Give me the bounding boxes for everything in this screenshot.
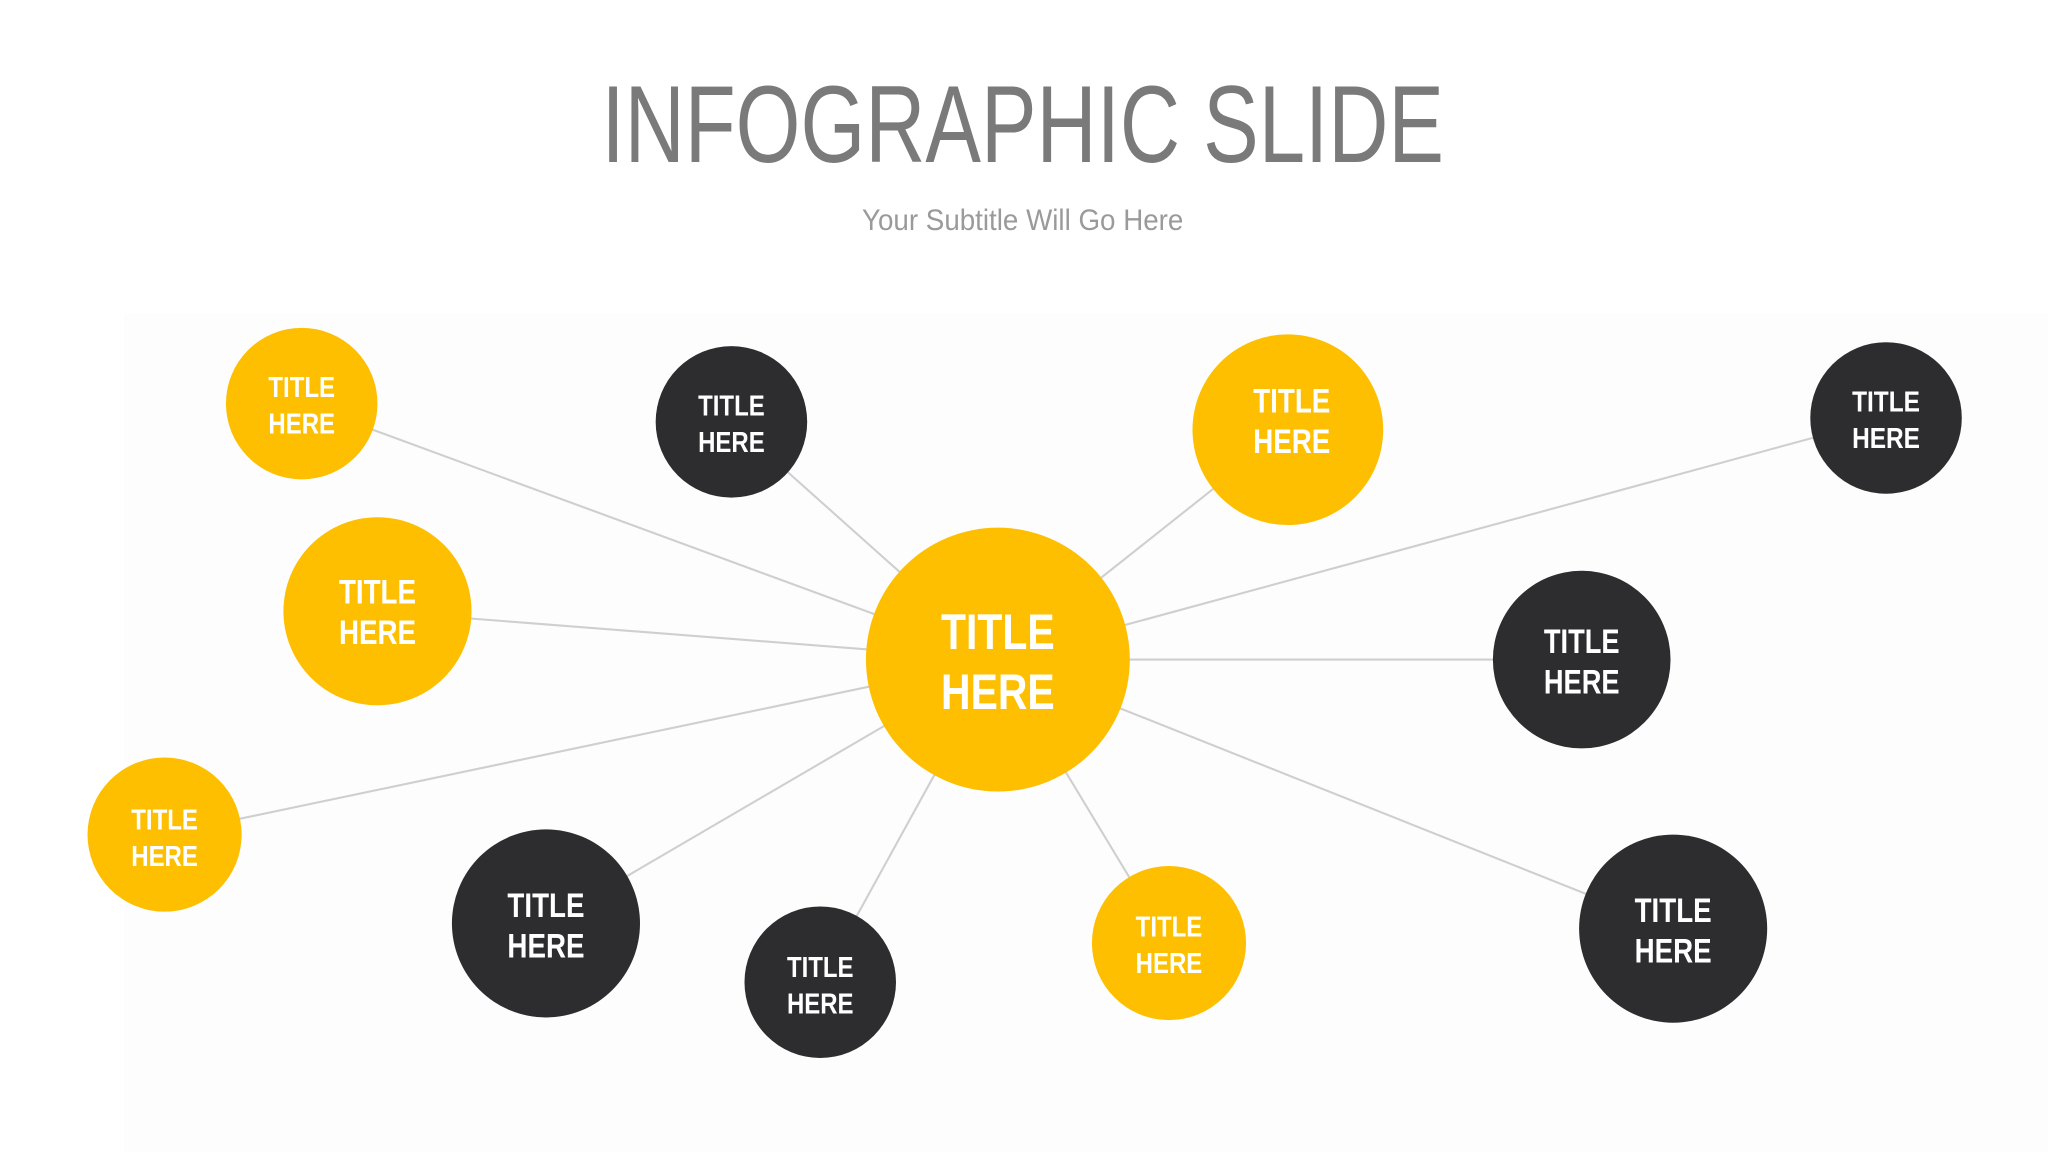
- node: yellow far left: HERE: [131, 841, 198, 873]
- node: yellow bottom: [1092, 866, 1246, 1020]
- node: yellow top-right: HERE: [1253, 423, 1330, 461]
- node: dark far right: TITLE: [1852, 386, 1920, 418]
- node: yellow top-right: TITLE: [1253, 383, 1330, 421]
- node: dark bottom: HERE: [787, 989, 854, 1021]
- node: yellow top-left: HERE: [268, 409, 335, 441]
- title: INFOGRAPHIC SLIDE: [601, 64, 1444, 186]
- node: yellow top-left: TITLE: [268, 372, 335, 404]
- node: dark bottom-left: HERE: [507, 927, 584, 965]
- node: yellow far left: [88, 758, 242, 912]
- node: dark far right: [1810, 342, 1962, 494]
- node: yellow bottom: HERE: [1136, 948, 1202, 980]
- node: dark right: [1493, 571, 1671, 748]
- node: yellow bottom: TITLE: [1136, 911, 1202, 943]
- node: yellow left: [283, 517, 472, 705]
- connector lines: [165, 404, 1886, 982]
- node: dark bottom: TITLE: [787, 952, 854, 984]
- node: dark bottom: [744, 906, 896, 1058]
- node: dark bottom-right: TITLE: [1635, 892, 1712, 930]
- node: dark top: TITLE: [698, 390, 765, 422]
- node: yellow top-right: [1192, 334, 1383, 525]
- node: dark far right: HERE: [1852, 423, 1920, 455]
- node: dark right: HERE: [1544, 664, 1620, 702]
- node: dark bottom-left: [452, 829, 640, 1017]
- node: dark top: HERE: [698, 427, 765, 459]
- node: yellow top-left: [226, 328, 377, 479]
- node: yellow left: TITLE: [339, 573, 416, 611]
- node: dark bottom-right: HERE: [1635, 933, 1712, 971]
- node: dark top: [656, 346, 807, 498]
- node: yellow far left: TITLE: [131, 804, 198, 836]
- central hub: TITLE: [941, 604, 1055, 660]
- central hub: HERE: [941, 664, 1055, 720]
- subtitle: Your Subtitle Will Go Here: [862, 204, 1183, 237]
- central hub: [866, 528, 1130, 792]
- node: dark bottom-left: TITLE: [507, 887, 584, 925]
- node: dark right: TITLE: [1544, 623, 1620, 661]
- node: dark bottom-right: [1579, 835, 1767, 1023]
- node: yellow left: HERE: [339, 614, 416, 652]
